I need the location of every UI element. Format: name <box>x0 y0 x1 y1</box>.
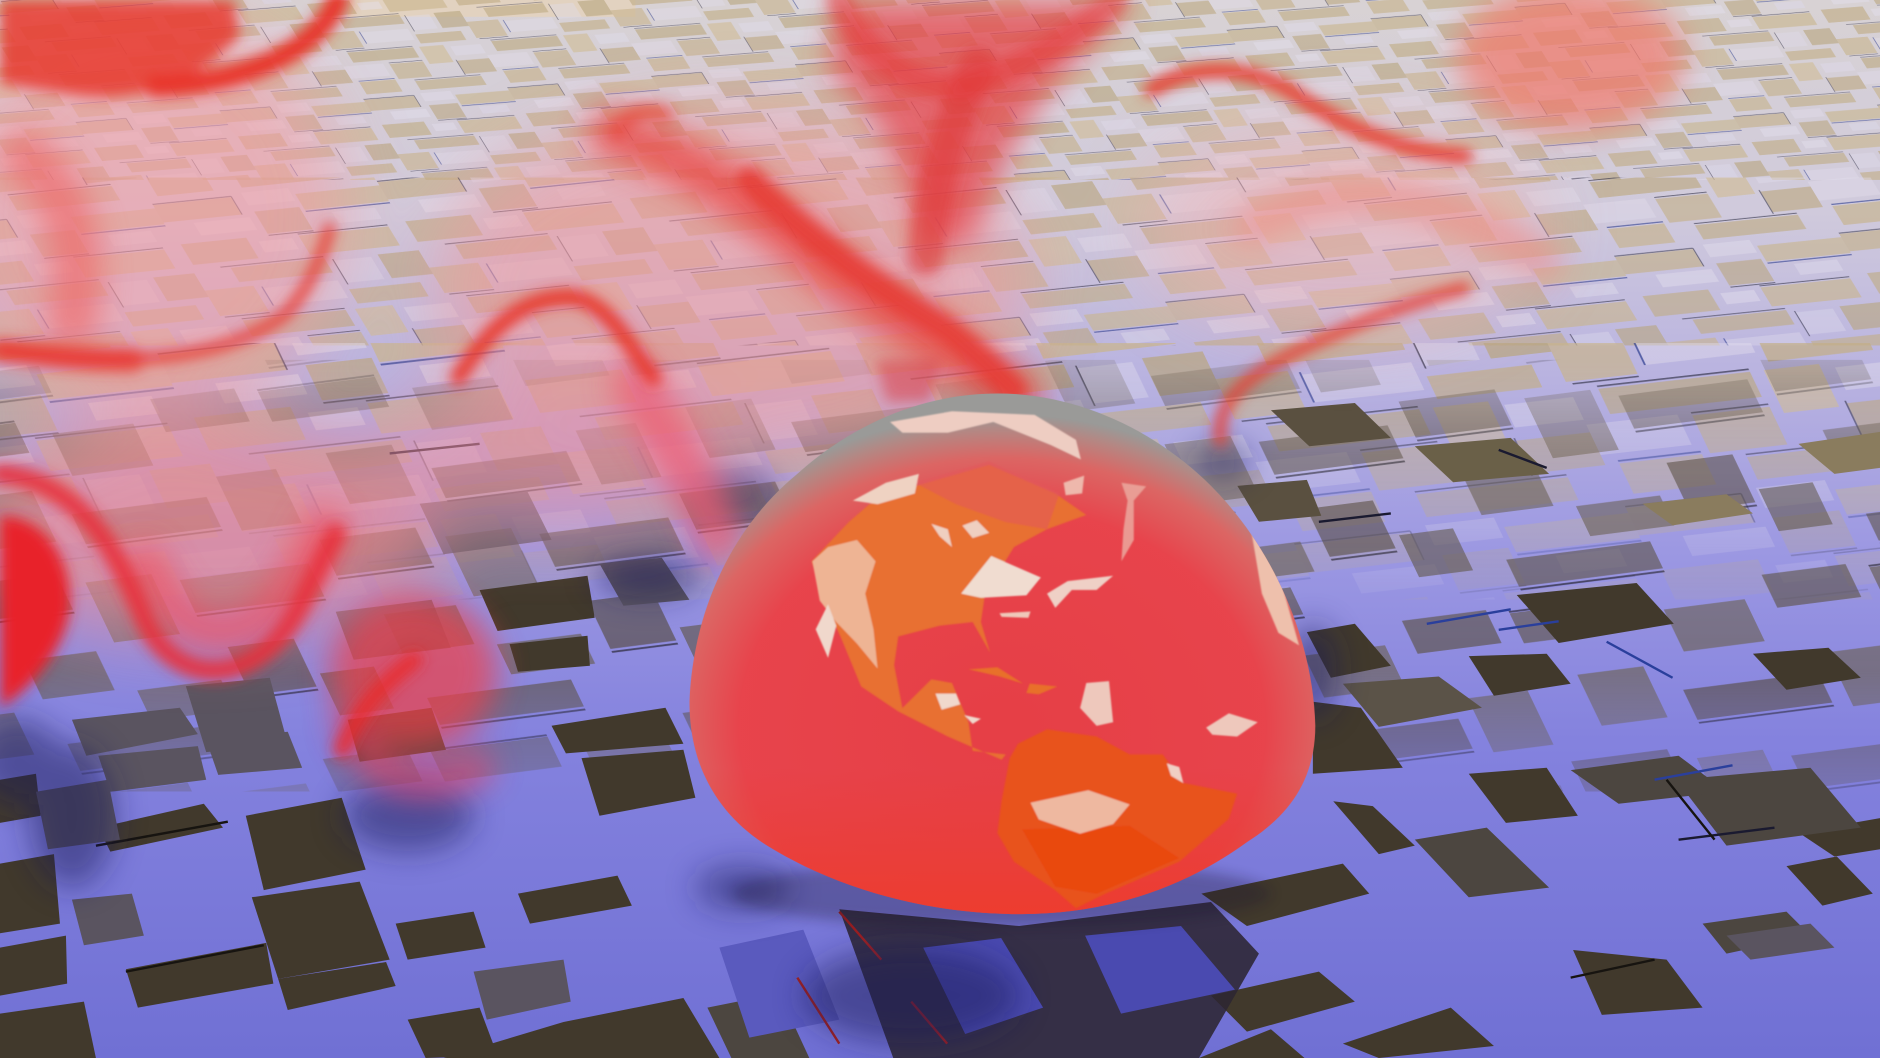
ribbon: far-left blob <box>0 516 70 708</box>
North America <box>812 465 1086 760</box>
Brazil coast cloud <box>1167 763 1183 783</box>
Pacific cloud streak <box>816 604 836 658</box>
Great Lakes clouds <box>931 520 989 547</box>
South America <box>997 729 1237 908</box>
ribbon: lower-right sweep <box>1220 288 1465 441</box>
blue tiles over dark floor <box>719 926 1235 1038</box>
red smoke ribbons, sharp layer <box>0 0 1465 750</box>
sand strip at top edge <box>348 0 635 17</box>
Earth dome <box>689 393 1315 927</box>
large tiles <box>0 343 1880 600</box>
ribbon: base of stem <box>875 360 941 402</box>
continents and clouds <box>812 411 1299 908</box>
Atlantic storm cloud <box>961 556 1041 598</box>
translucent smoke ribbons, soft layer <box>24 0 1685 782</box>
southern tip orange glow <box>1022 826 1179 894</box>
dark floor beneath dome <box>839 902 1259 1058</box>
thin red and blue tile edges <box>96 444 1774 1044</box>
ribbon: central diagonal <box>749 180 1013 390</box>
dome glass body <box>689 393 1315 914</box>
ribbon: central stem <box>926 66 977 258</box>
ribbon: left band <box>0 350 132 360</box>
dark recessed floor tiles <box>0 403 1880 1058</box>
small far tiles <box>0 0 1880 180</box>
Central America cloud <box>935 694 981 724</box>
ribbon: upper-right sweep <box>1151 71 1465 156</box>
Canada haze <box>915 461 1059 529</box>
dome lower red rim <box>689 393 1315 914</box>
ribbon: top-left blob <box>0 0 240 97</box>
ribbon: lower pink curl <box>342 660 414 750</box>
ribbon and dome shadows <box>0 445 1337 1044</box>
ribbon: stem upper <box>839 0 1115 86</box>
grey-brown tiles in mid distance <box>0 360 1880 792</box>
Canadian cloud <box>853 474 919 504</box>
ribbon: small arc at centre left <box>617 112 665 132</box>
ribbon: top-left swoosh <box>156 0 338 86</box>
ribbon: lower-left loop <box>0 474 336 670</box>
Greenland ice cap <box>890 411 1081 459</box>
medium tiles <box>0 178 1880 345</box>
Atlantic cloud band <box>1047 576 1113 608</box>
dome soft ground shadow <box>731 860 1271 927</box>
grey shaded tiles <box>36 492 1834 1020</box>
small cloud <box>999 611 1030 618</box>
Caribbean islands <box>969 667 1057 694</box>
pink heat haze <box>0 12 1547 636</box>
Arctic cloud curl <box>1121 483 1146 561</box>
western mountains <box>812 540 878 669</box>
ribbon: centre arch <box>458 297 653 378</box>
dome surface features <box>812 411 1299 908</box>
right limb land <box>1252 533 1299 645</box>
Labrador swirl <box>1064 476 1084 495</box>
mid Atlantic clouds <box>1080 681 1258 737</box>
Amazon cloud <box>1030 790 1130 834</box>
ribbon: left sweep <box>0 228 330 359</box>
